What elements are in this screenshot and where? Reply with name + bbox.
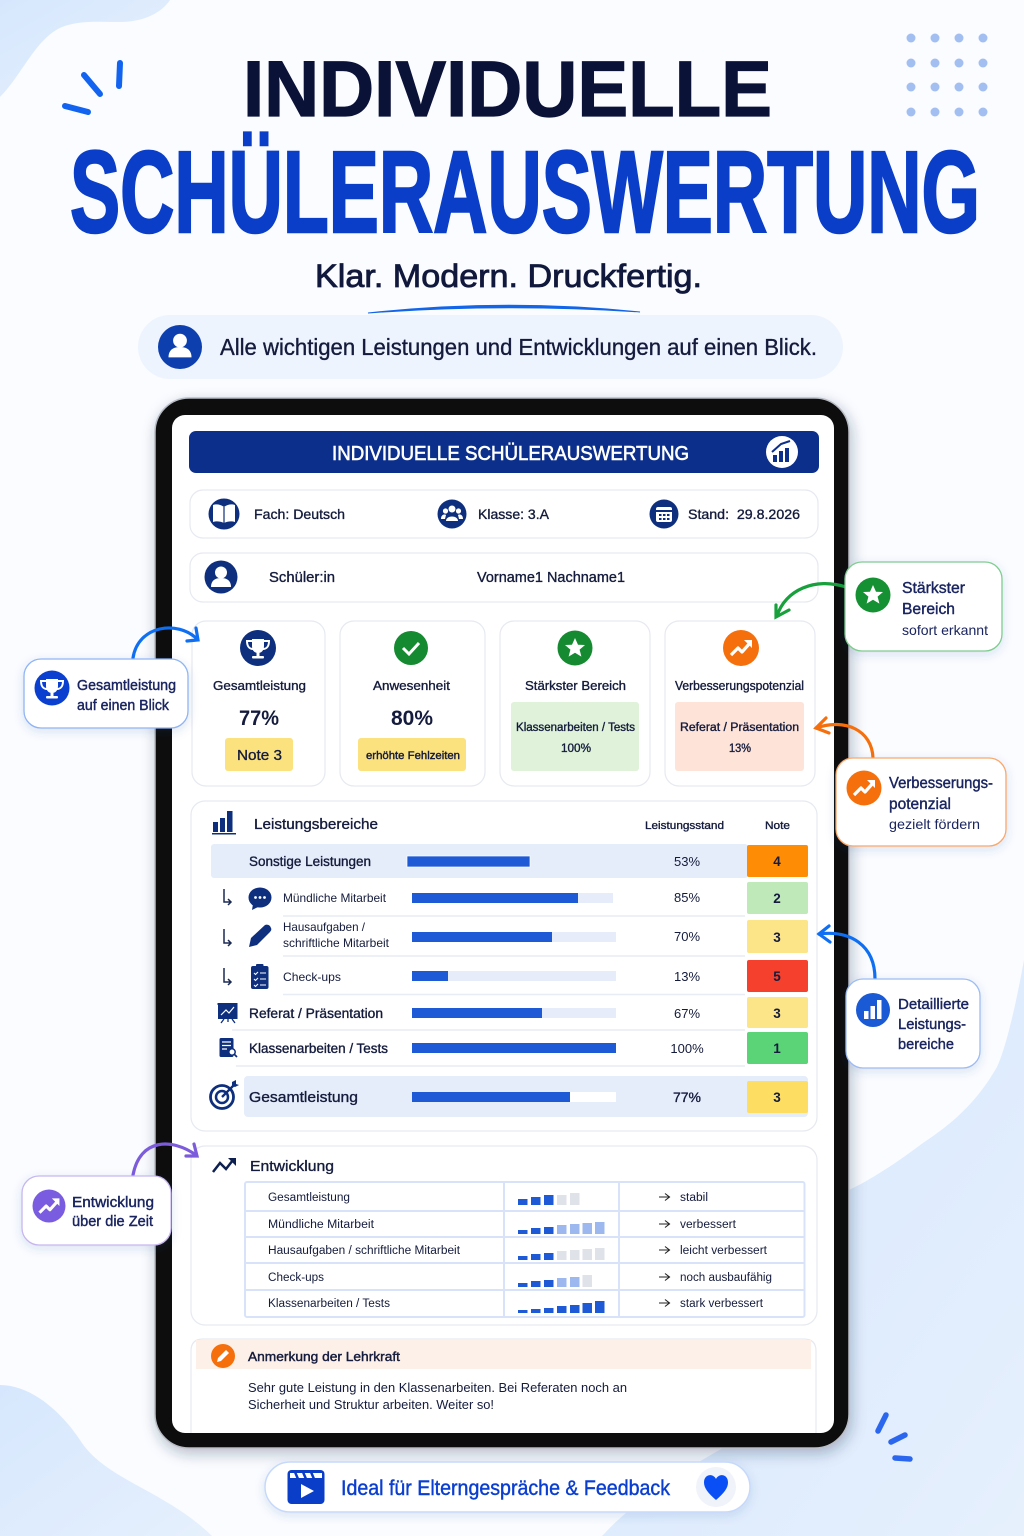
label: Anwesenheit	[373, 678, 450, 693]
icon: star	[856, 578, 890, 612]
row: Gesamtleistung trend	[268, 1192, 708, 1205]
row: Klassenarbeiten trend: stark verbessert	[680, 1298, 764, 1310]
row: Referat: 67%	[674, 1006, 700, 1021]
icon: class group	[438, 500, 466, 528]
icon: trend line	[213, 1158, 236, 1172]
info row card	[190, 490, 818, 538]
icon: pencil	[211, 1344, 235, 1368]
arrow: Stärkster Bereich	[776, 584, 846, 617]
student label: Schüler:in	[269, 570, 335, 586]
row: Hausaufgaben trend	[268, 1245, 768, 1260]
potential box	[675, 702, 804, 771]
strongest area box: Klassenarbeiten / Tests	[516, 722, 635, 734]
heading: Leistungsbereiche	[254, 816, 378, 833]
attendance badge	[358, 738, 466, 771]
note body	[248, 1381, 627, 1412]
row: Hausaufgaben: 70%	[674, 929, 700, 944]
attendance badge: erhöhte Fehlzeiten	[366, 750, 460, 762]
callout text: Verbesserungs-	[889, 775, 993, 792]
column headers: Leistungsstand	[645, 820, 724, 832]
note body: Sehr gute Leistung in den Klassenarbeiten. Bei Referaten noch an	[248, 1381, 627, 1395]
icon: chart	[766, 436, 798, 468]
row: Hausaufgaben trend: leicht verbessert	[680, 1245, 768, 1257]
strongest area box: 100%	[561, 743, 591, 755]
tablet frame	[155, 398, 849, 1448]
callout text: auf einen Blick	[77, 698, 170, 714]
date text: Stand: 29.8.2026	[688, 506, 800, 522]
KPI card: Verbesserungspotenzial	[665, 621, 815, 786]
icon: user	[158, 325, 202, 369]
icon: bars	[856, 993, 890, 1027]
callout text	[77, 678, 176, 714]
row: Klassenarbeiten trend	[268, 1298, 764, 1313]
value: 77%	[239, 707, 279, 730]
student card	[190, 553, 818, 602]
label: Stärkster Bereich	[525, 678, 626, 693]
background blob: bottom left	[0, 1385, 212, 1536]
callout: Detaillierte Leistungsbereiche	[846, 979, 980, 1068]
callout: Stärkster Bereich	[845, 562, 1002, 651]
value: 80%	[391, 707, 433, 730]
panel: Entwicklung	[191, 1146, 817, 1325]
background blob: bottom right	[602, 960, 1024, 1536]
report header bar	[189, 431, 819, 473]
callout text	[889, 775, 993, 832]
grade badge: Note 3	[237, 747, 282, 764]
callout text: Detaillierte	[898, 996, 969, 1013]
decorative dot grid	[906, 34, 988, 116]
callout text: sofort erkannt	[902, 622, 988, 638]
row: Check-ups trend	[268, 1272, 772, 1287]
label: Verbesserungspotenzial	[675, 679, 804, 693]
callout: Gesamtleistung	[24, 659, 188, 728]
potential box: Referat / Präsentation	[680, 722, 799, 734]
icon: heart	[696, 1467, 736, 1507]
column headers	[645, 820, 790, 832]
arrow: Entwicklung	[133, 1144, 197, 1175]
callout text: gezielt fördern	[889, 816, 980, 832]
callout: Entwicklung	[22, 1176, 171, 1245]
callout text: Gesamtleistung	[77, 678, 176, 694]
row: Gesamtleistung: 3	[773, 1090, 781, 1105]
row: Hausaufgaben	[224, 920, 808, 953]
callout text: Stärkster	[902, 580, 965, 597]
KPI card: Gesamtleistung	[192, 621, 325, 786]
note body: Sicherheit und Struktur arbeiten. Weiter so!	[248, 1398, 494, 1412]
KPI card: Anwesenheit	[340, 621, 485, 786]
row: Klassenarbeiten: 1	[773, 1041, 781, 1056]
row: Gesamtleistung	[210, 1076, 808, 1117]
icon: trend up	[723, 630, 759, 666]
icon: trophy	[240, 630, 276, 666]
row: Check-ups	[224, 960, 808, 992]
callout text: potenzial	[889, 796, 951, 813]
row: Gesamtleistung: Gesamtleistung	[249, 1089, 358, 1106]
row: Check-ups: Check-ups	[283, 970, 341, 984]
row: Mündliche Mitarbeit: Mündliche Mitarbeit	[283, 891, 387, 905]
icon: calendar	[650, 500, 678, 528]
student name: Vorname1 Nachname1	[477, 570, 625, 586]
label: Gesamtleistung	[213, 678, 306, 693]
row: Check-ups: 13%	[674, 969, 700, 984]
row: Klassenarbeiten trend: Klassenarbeiten / Tests	[268, 1298, 390, 1310]
background blob: top left	[0, 0, 170, 97]
intro text: Alle wichtigen Leistungen und Entwicklungen auf einen Blick.	[220, 334, 817, 360]
row: Hausaufgaben: Hausaufgaben /	[283, 920, 366, 934]
row: Klassenarbeiten: Klassenarbeiten / Tests	[249, 1041, 388, 1056]
row: Sonstige Leistungen	[211, 844, 808, 878]
grade badge	[225, 738, 293, 771]
row: Referat: 3	[773, 1006, 781, 1021]
callout text	[902, 580, 988, 638]
intro pill	[138, 315, 843, 379]
heading: Entwicklung	[250, 1158, 334, 1175]
callout: Verbesserungspotenzial	[836, 758, 1006, 846]
callout text	[72, 1195, 154, 1230]
class text: Klasse: 3.A	[478, 506, 550, 522]
panel: Anmerkung der Lehrkraft	[191, 1339, 816, 1433]
row: Klassenarbeiten: 100%	[670, 1041, 704, 1056]
bottom text: Ideal für Elterngespräche & Feedback	[341, 1477, 670, 1500]
row: Referat: Referat / Präsentation	[249, 1006, 383, 1021]
subtitle underline	[368, 305, 640, 313]
row: Hausaufgaben trend: Hausaufgaben / schriftliche Mitarbeit	[268, 1245, 461, 1257]
note heading: Anmerkung der Lehrkraft	[248, 1350, 401, 1364]
row: Mündliche Mitarbeit trend	[268, 1219, 737, 1234]
decorative sparks bottom right	[878, 1415, 910, 1459]
icon: trend	[32, 1190, 66, 1222]
icon: star	[558, 630, 592, 666]
callout text	[898, 996, 969, 1053]
subject text: Fach: Deutsch	[254, 506, 345, 522]
row: Hausaufgaben: 3	[773, 930, 781, 945]
row: Gesamtleistung trend: Gesamtleistung	[268, 1192, 350, 1204]
icon: student	[204, 560, 238, 594]
callout text: Leistungs-	[898, 1016, 966, 1033]
KPI card: Stärkster Bereich	[500, 621, 650, 786]
title line 1: INDIVIDUELLE	[243, 44, 772, 133]
subtitle: Klar. Modern. Druckfertig.	[315, 258, 702, 294]
icon: trend up	[846, 770, 882, 806]
row: Mündliche Mitarbeit: 85%	[674, 890, 700, 905]
row: Sonstige Leistungen: 53%	[674, 854, 700, 869]
icon: trophy	[34, 670, 70, 706]
row: Referat	[218, 997, 808, 1028]
row: Hausaufgaben: schriftliche Mitarbeit	[283, 936, 390, 950]
row: Mündliche Mitarbeit: 2	[773, 891, 781, 906]
row: Mündliche Mitarbeit	[224, 882, 808, 914]
callout text: bereiche	[898, 1036, 954, 1053]
table grid	[245, 1182, 804, 1317]
column headers: Note	[765, 820, 790, 832]
strongest area box	[511, 702, 639, 771]
row: Check-ups trend: Check-ups	[268, 1272, 324, 1284]
header title: INDIVIDUELLE SCHÜLERAUSWERTUNG	[332, 443, 689, 465]
arrow: Gesamtleistung	[133, 628, 198, 658]
row: Sonstige Leistungen: 4	[773, 854, 781, 869]
callout text: Bereich	[902, 601, 955, 618]
row: Klassenarbeiten	[220, 1032, 808, 1064]
row: Gesamtleistung: 77%	[673, 1089, 701, 1105]
panel: Leistungsbereiche	[191, 801, 817, 1131]
icon: book	[208, 498, 240, 530]
row: Check-ups trend: noch ausbaufähig	[680, 1272, 772, 1284]
row dividers	[232, 916, 745, 1066]
arrow: Verbesserungspotenzial	[816, 718, 873, 758]
callout text: Entwicklung	[72, 1195, 154, 1211]
potential box: 13%	[729, 743, 751, 755]
bottom pill	[265, 1462, 750, 1512]
title	[70, 44, 980, 257]
row: Gesamtleistung trend: stabil	[680, 1192, 708, 1204]
icon: video clapper	[288, 1470, 324, 1504]
row: Check-ups: 5	[773, 969, 781, 984]
decorative sparks top left	[65, 63, 120, 112]
row: Mündliche Mitarbeit trend: verbessert	[680, 1219, 737, 1231]
icon: bar chart	[212, 811, 236, 834]
arrow: Detaillierte Leistungsbereiche	[819, 926, 875, 979]
callout text: über die Zeit	[72, 1214, 153, 1230]
row: Mündliche Mitarbeit trend: Mündliche Mitarbeit	[268, 1219, 375, 1231]
row: Sonstige Leistungen: Sonstige Leistungen	[249, 854, 371, 869]
icon: check	[394, 631, 428, 665]
